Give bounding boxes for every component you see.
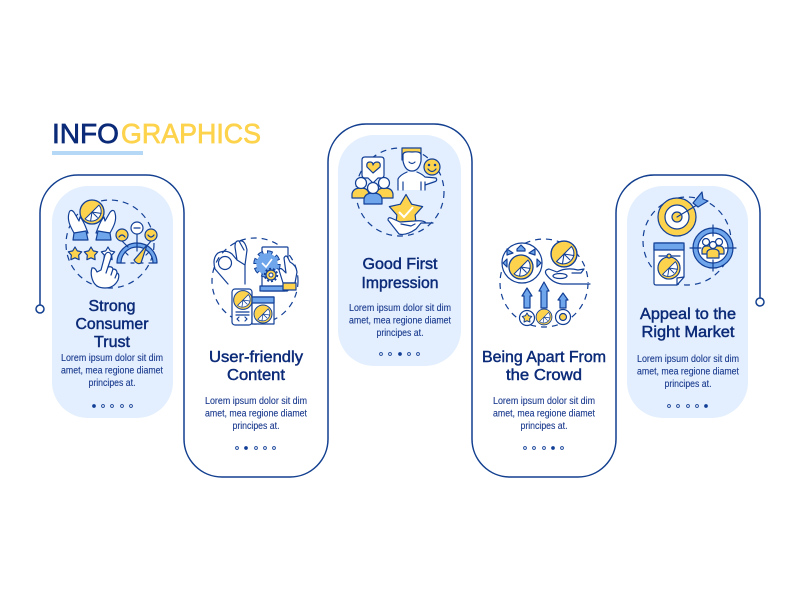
heading: user-friendly content: User-friendly xyxy=(209,349,303,366)
body text: amet, mea regione diamet xyxy=(61,366,163,376)
icon: target, crosshair and product sheet xyxy=(643,192,736,285)
body text: amet, mea regione diamet xyxy=(205,408,307,420)
heading: appeal to the right market xyxy=(640,306,736,341)
title underline xyxy=(52,151,143,155)
heading: good first impression: Impression xyxy=(362,275,438,292)
body text xyxy=(493,396,595,432)
body text: amet, mea regione diamet xyxy=(349,316,451,326)
panel: strong consumer trust xyxy=(52,186,173,418)
body text: principes at. xyxy=(664,379,712,390)
heading: strong consumer trust: Strong xyxy=(88,298,136,315)
body text: principes at. xyxy=(520,421,568,432)
pagination dots xyxy=(380,353,419,355)
connector outline linking the five cards xyxy=(36,124,764,477)
heading: strong consumer trust xyxy=(76,298,149,351)
heading: being apart from the crowd xyxy=(482,349,606,384)
body text xyxy=(637,354,739,390)
panel: user-friendly content xyxy=(205,238,307,449)
title xyxy=(52,118,261,149)
pagination dots xyxy=(668,405,707,407)
body text: principes at. xyxy=(88,378,136,389)
title: GRAPHICS xyxy=(121,118,261,149)
body text xyxy=(205,396,307,432)
heading: good first impression: Good First xyxy=(362,256,438,273)
pagination dots xyxy=(236,447,275,449)
heading: being apart from the crowd: Being Apart From xyxy=(482,349,606,366)
heading: being apart from the crowd: the Crowd xyxy=(506,367,582,384)
body text: amet, mea regione diamet xyxy=(493,408,595,420)
body text: Lorem ipsum dolor sit dim xyxy=(637,354,739,365)
icon: standout orange with rising arrows xyxy=(500,239,590,327)
heading: user-friendly content: Content xyxy=(227,367,286,384)
heading: strong consumer trust: Consumer xyxy=(76,316,149,333)
body text: principes at. xyxy=(232,421,280,432)
body text: Lorem ipsum dolor sit dim xyxy=(205,396,307,407)
panel: being apart from the crowd xyxy=(482,239,606,449)
heading: user-friendly content xyxy=(209,349,303,384)
panel: appeal to the right market xyxy=(627,186,748,418)
body text: Lorem ipsum dolor sit dim xyxy=(61,353,163,364)
heading: good first impression xyxy=(362,256,438,292)
pagination dots xyxy=(93,405,132,407)
body text: principes at. xyxy=(376,328,424,339)
heading: appeal to the right market: Right Market xyxy=(642,324,735,341)
icon: trust with hands, stars and gauge xyxy=(66,200,157,288)
body text: amet, mea regione diamet xyxy=(637,366,739,378)
icon: ok gesture, settings and devices xyxy=(212,238,298,325)
heading: appeal to the right market: Appeal to the xyxy=(640,306,736,323)
body text xyxy=(349,303,451,339)
title: INFO xyxy=(52,118,119,149)
body text xyxy=(61,353,163,389)
panel: good first impression xyxy=(338,135,461,366)
pagination dots xyxy=(524,447,563,449)
icon: people, man, smiley and star xyxy=(352,148,444,236)
heading: strong consumer trust: Trust xyxy=(94,334,131,351)
body text: Lorem ipsum dolor sit dim xyxy=(349,303,451,314)
body text: Lorem ipsum dolor sit dim xyxy=(493,396,595,407)
